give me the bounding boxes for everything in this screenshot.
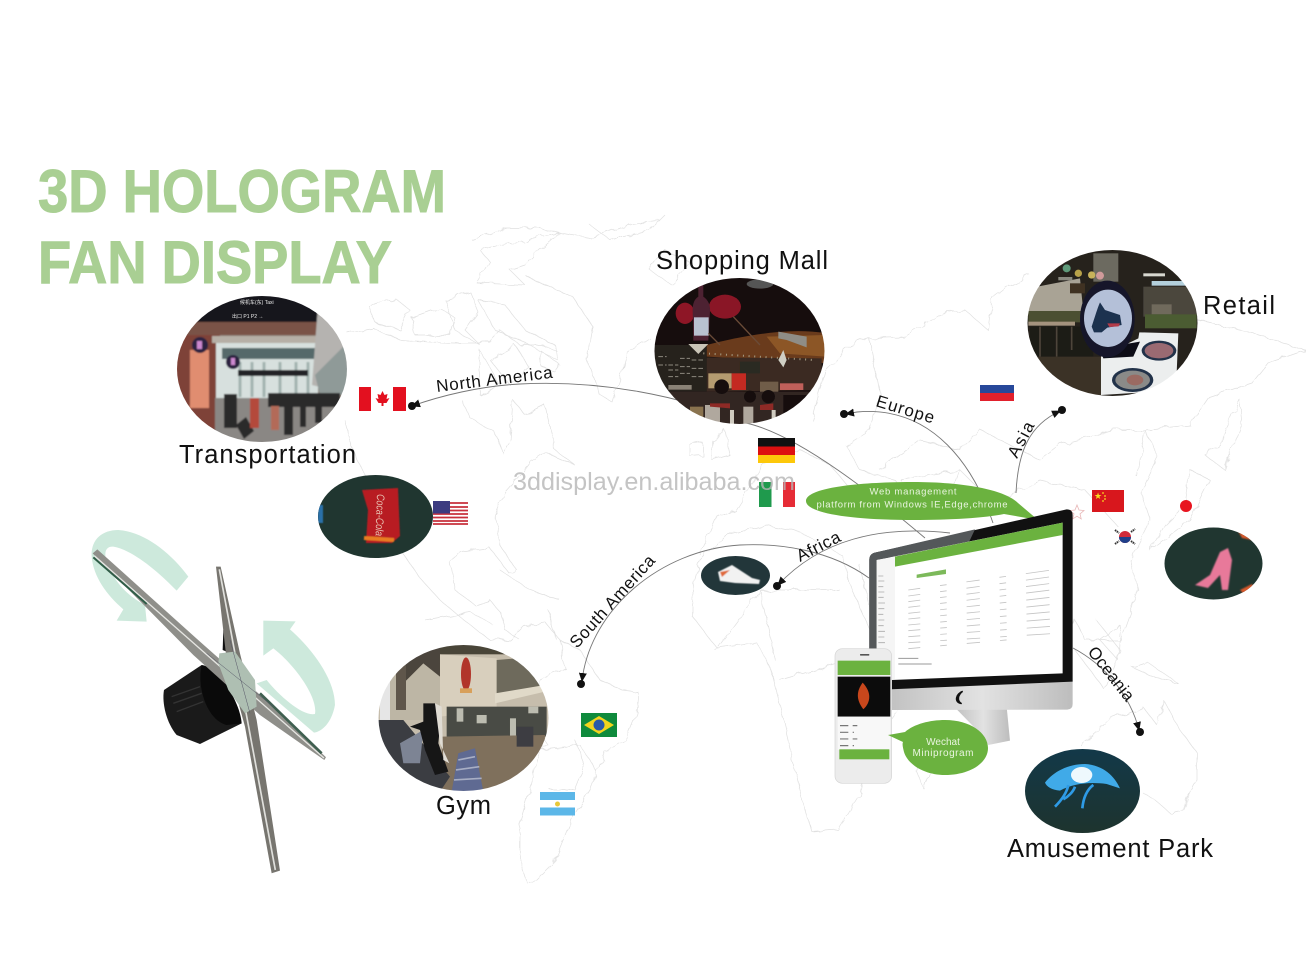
region labels [435, 363, 1139, 705]
sign text: 出口 P1 P2 → [232, 313, 263, 320]
motor vents [172, 687, 203, 712]
photo: retail [1025, 248, 1202, 398]
sign text [232, 299, 274, 320]
monitor [869, 509, 1073, 745]
arc: south america [582, 545, 869, 681]
phone header [838, 661, 890, 675]
bracket behind blade [223, 630, 228, 652]
photo: jellyfish [1025, 749, 1140, 833]
phone [835, 649, 892, 783]
flag: korea [1112, 527, 1138, 547]
oceania outline [1080, 625, 1197, 813]
apple-style logo [956, 691, 963, 704]
speech bubble: web management [806, 482, 1038, 520]
label: retail: Retail [1203, 292, 1275, 320]
speech bubble: wechat miniprogram: Miniprogram [912, 748, 974, 759]
infographic canvas [38, 169, 1306, 884]
bezel grey reflection [869, 529, 975, 653]
label: africa: Africa [793, 527, 844, 566]
flag: italy [759, 482, 795, 507]
phone video [838, 677, 890, 717]
can script: Coca-Cola [373, 494, 386, 536]
label: shopping mall: Shopping Mall [656, 247, 828, 275]
screen [877, 523, 1063, 680]
flag: russia [980, 385, 1014, 401]
speech bubble: wechat miniprogram: Wechat [926, 737, 960, 748]
rotation arrow left [92, 530, 188, 622]
flag: usa [433, 501, 468, 525]
flag: china [1092, 490, 1124, 512]
label: south america: South America [566, 551, 659, 652]
greenland [472, 215, 665, 402]
arc: north america [412, 383, 925, 538]
flag: argentina [540, 792, 575, 816]
flag: germany [758, 438, 795, 463]
sign text: 候机车(东) Taxi [240, 299, 274, 306]
monitor bezel [869, 509, 1073, 693]
speech bubble: web management: Web management [870, 486, 957, 498]
africa outline [693, 525, 935, 832]
flag: canada [359, 387, 406, 411]
label: oceania: Oceania [1084, 643, 1139, 705]
hub plate [218, 652, 257, 713]
motor cylinder [163, 665, 242, 744]
arc: europe [846, 411, 993, 523]
blade upper and lower [216, 567, 280, 873]
flag: japan [1180, 500, 1192, 512]
hub cross lines [207, 640, 273, 713]
canadian arctic islands [370, 292, 560, 395]
label: gym: Gym [436, 792, 491, 820]
label: transportation: Transportation [179, 441, 356, 469]
photo: high heel [1164, 528, 1262, 600]
screen buttons [917, 569, 946, 578]
hologram fan device [92, 530, 335, 873]
phone button [839, 749, 889, 759]
south america outline [510, 622, 638, 884]
phone body [835, 649, 892, 783]
monitor chin [892, 680, 1073, 710]
phone speaker [860, 654, 869, 656]
pagination [898, 658, 932, 664]
asia outline [860, 275, 1306, 690]
arcs and region labels [412, 383, 1139, 730]
motor face shade [200, 665, 242, 725]
label: asia: Asia [1004, 418, 1039, 461]
title [38, 158, 446, 296]
screen header [895, 523, 1063, 567]
label: europe: Europe [874, 392, 937, 427]
speech bubble: web management: platform from Windows IE,Edge,chrome [816, 500, 1008, 510]
watermark: 3ddisplay.en.alibaba.com [513, 468, 795, 496]
photo: shopping mall [654, 278, 824, 424]
photo: gym [377, 643, 550, 793]
photo: sneaker [701, 556, 770, 595]
arc end dots [408, 402, 1144, 736]
title line 2: FAN DISPLAY [38, 229, 392, 296]
table rows [908, 569, 1057, 649]
title line 1: 3D HOLOGRAM [38, 158, 446, 225]
world map outline [345, 215, 1306, 884]
flame figure [858, 683, 869, 709]
label: amusement park: Amusement Park [1007, 835, 1213, 863]
europe outline [650, 250, 905, 555]
photo: coke can [318, 475, 433, 558]
screen sidebar [877, 557, 895, 679]
photo: transportation [175, 295, 350, 448]
north america outline [345, 328, 575, 640]
rotation arrow right [257, 621, 335, 733]
monitor stand [957, 707, 1010, 745]
speech bubble: wechat miniprogram [888, 720, 988, 775]
form lines [840, 726, 857, 746]
arc: oceania [1073, 648, 1139, 730]
flag: china: ★ [1094, 491, 1102, 501]
arc: asia [1016, 411, 1060, 493]
flag: brazil [581, 713, 617, 737]
phone form [838, 717, 890, 750]
label: north america: North America [435, 363, 554, 396]
arc: africa [778, 531, 950, 585]
sidebar lines [878, 576, 885, 643]
star outline [1070, 505, 1084, 519]
blade upper-left and lower-right [93, 549, 326, 760]
